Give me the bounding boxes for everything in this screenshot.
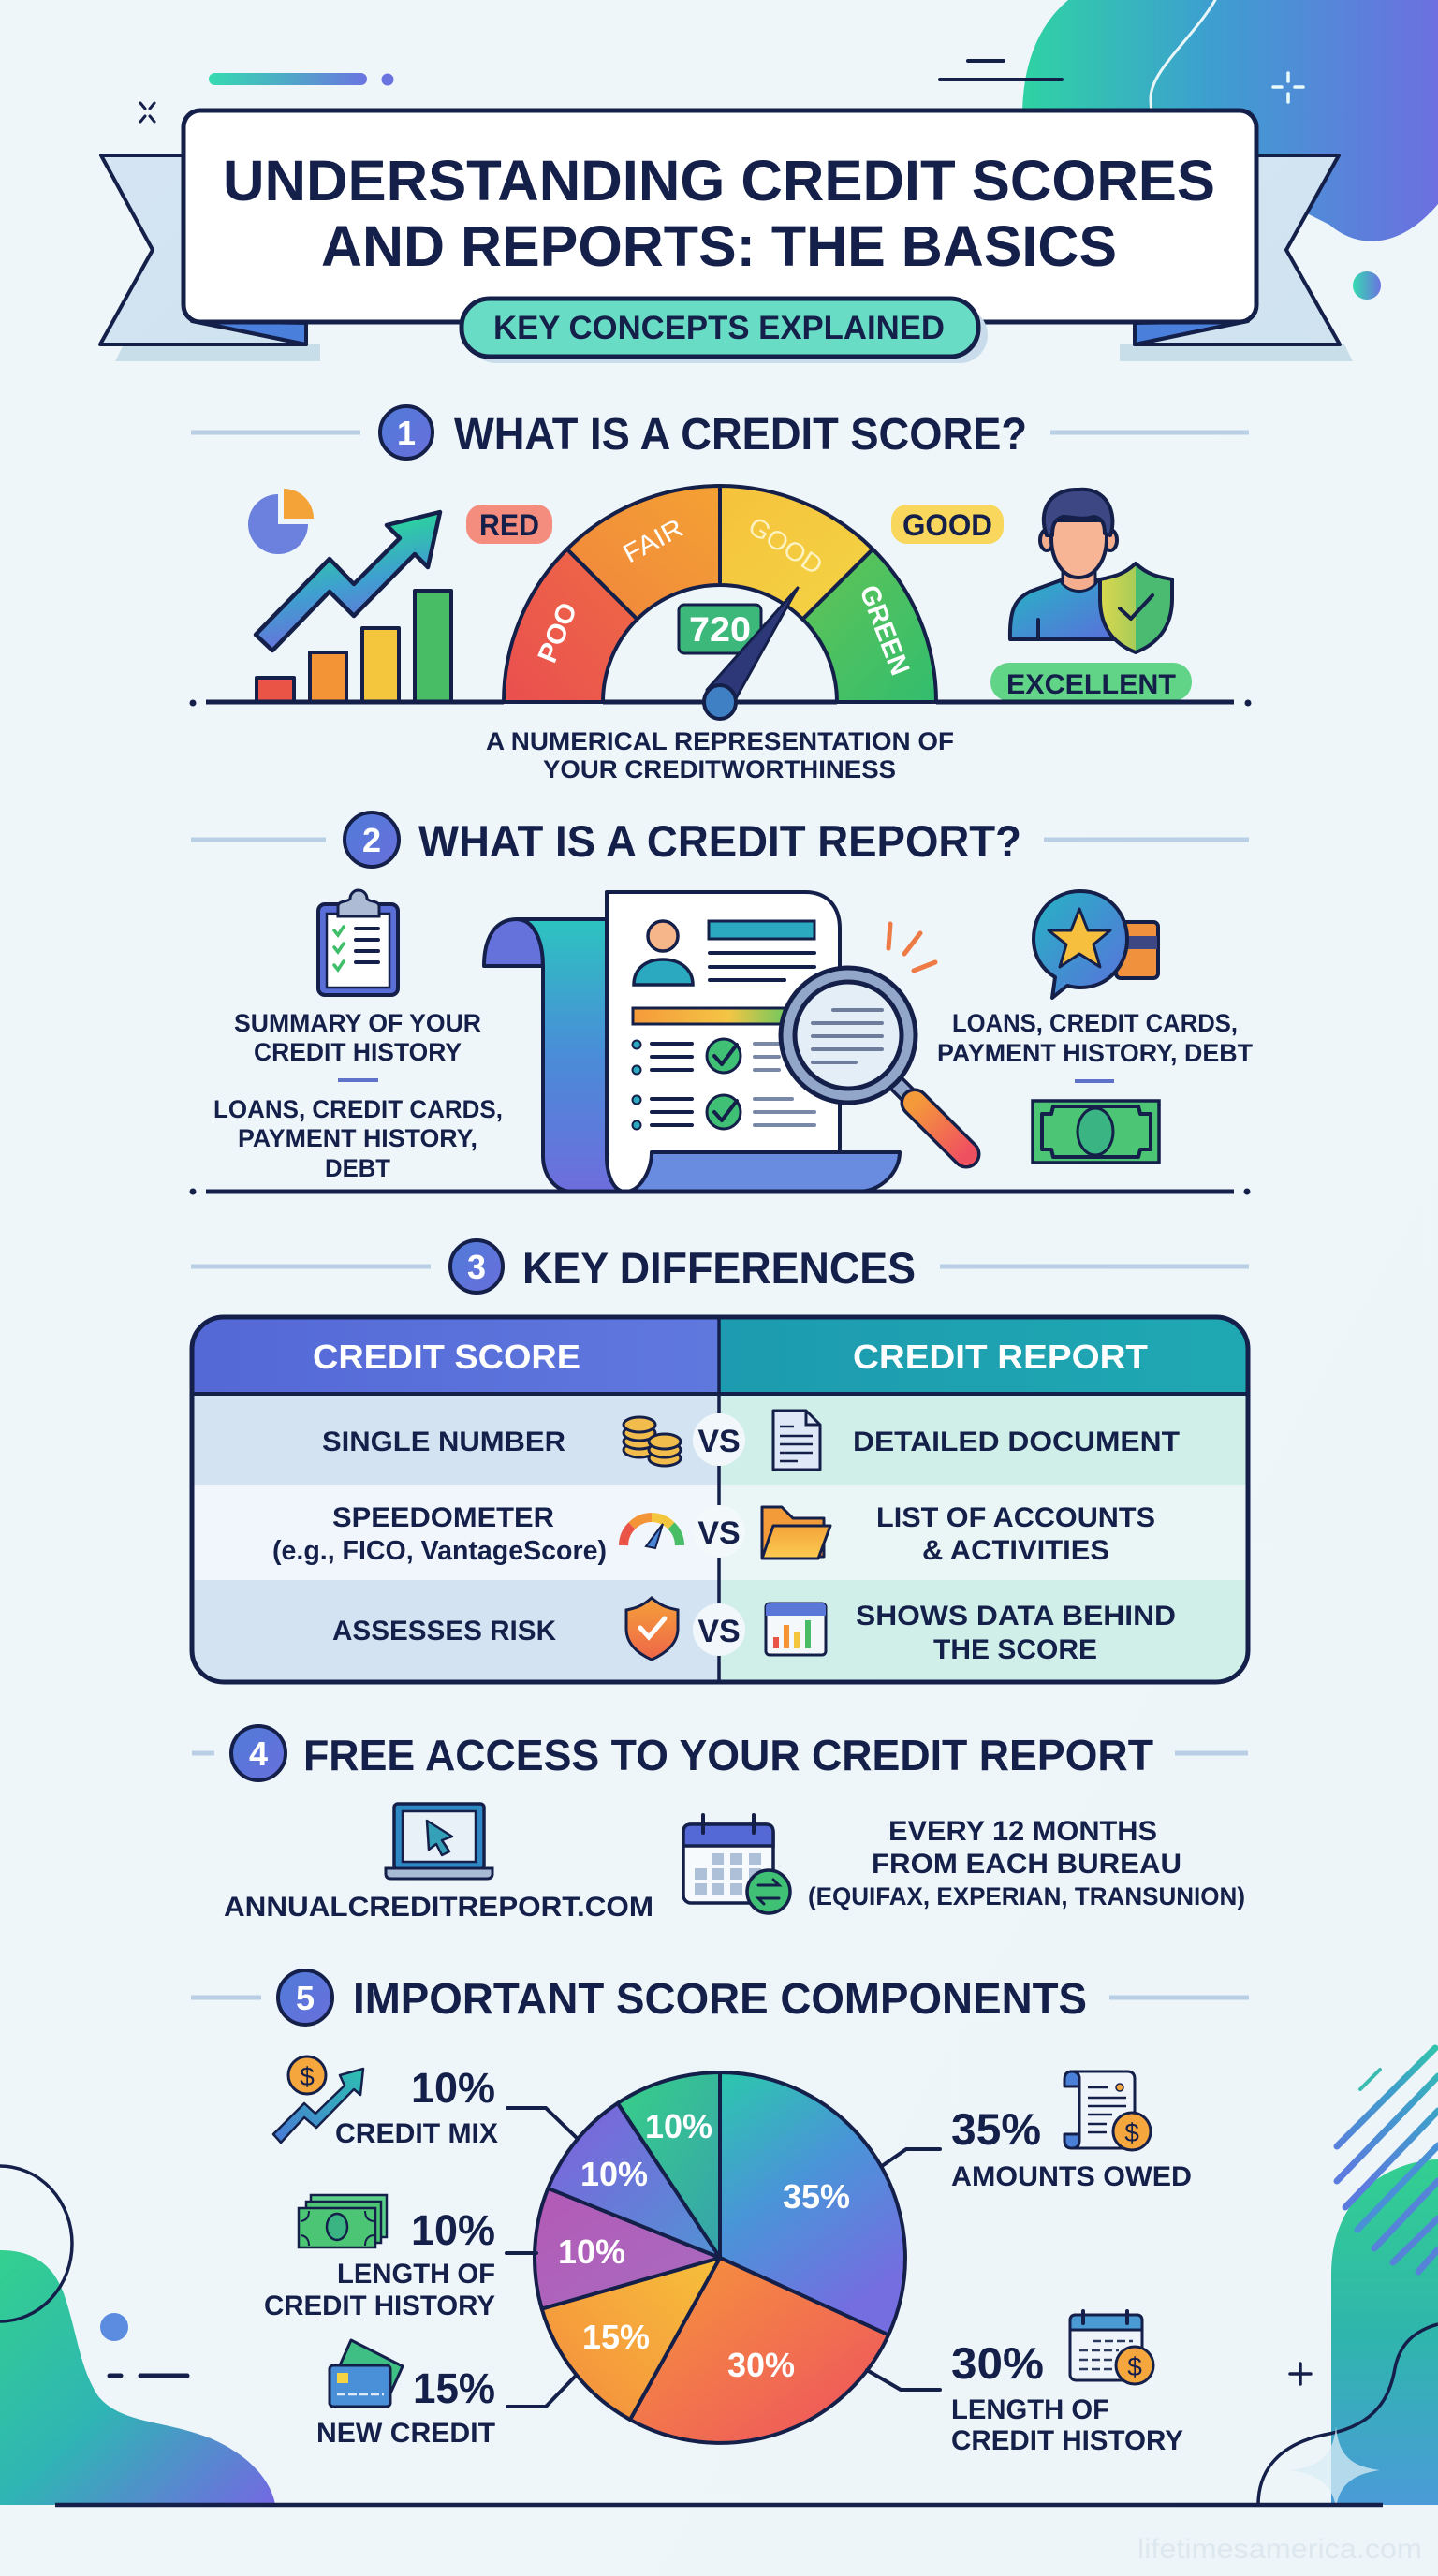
gauge: FAIR — [618, 513, 688, 568]
ribbon shadow — [115, 344, 1353, 361]
pie chart: score components: 10% — [645, 2107, 712, 2145]
caption: credit score definition: YOUR CREDITWORTHINESS — [543, 755, 896, 783]
label: new credit: NEW CREDIT — [316, 2418, 495, 2449]
label: GOOD — [891, 505, 1004, 544]
icon: folder — [762, 1507, 830, 1559]
label: amounts owed: AMOUNTS OWED — [951, 2161, 1192, 2192]
page — [607, 892, 840, 1192]
table headers: CREDIT SCORE — [313, 1338, 580, 1376]
comparison table: & ACTIVITIES — [922, 1535, 1109, 1566]
illustration: credit report scroll — [484, 892, 900, 1192]
icon: laptop — [386, 1804, 492, 1879]
title banner — [100, 110, 1353, 363]
decorative blob: bottom left — [0, 2166, 275, 2505]
label: EXCELLENT — [990, 663, 1192, 701]
section 1 heading: WHAT IS A CREDIT SCORE? — [454, 410, 1027, 460]
watermark text: lifetimesamerica.com — [1137, 2534, 1422, 2565]
pie chart: score components: 35% — [783, 2177, 850, 2216]
label: credit mix — [335, 2064, 498, 2149]
icon: money stack — [299, 2195, 387, 2247]
text: website: ANNUALCREDITREPORT.COM — [224, 1892, 653, 1923]
comparison table: THE SCORE — [933, 1634, 1097, 1665]
comparison table — [192, 1317, 1248, 1682]
text: summary of credit history — [234, 1009, 481, 1066]
row 1: SINGLE NUMBER — [322, 1427, 565, 1457]
pie chart: score components: 30% — [727, 2346, 795, 2384]
text: every 12 months: (EQUIFAX, EXPERIAN, TRANSUNION) — [808, 1882, 1245, 1910]
section 2 ground line — [189, 1189, 1251, 1194]
text: every 12 months: FROM EACH BUREAU — [872, 1849, 1181, 1880]
ribbon right — [1135, 155, 1340, 344]
decorative blob: bottom right — [1258, 2159, 1438, 2505]
needle — [707, 588, 798, 700]
title box — [183, 110, 1256, 322]
text: loans left — [213, 1095, 503, 1182]
text: loans right — [937, 1009, 1253, 1067]
label: length of credit history left — [264, 2206, 495, 2321]
caption: credit score definition: A NUMERICAL REPRESENTATION OF — [486, 727, 954, 755]
bar chart: rising bars — [257, 591, 451, 702]
icon: calendar — [683, 1815, 790, 1913]
text: every 12 months — [808, 1816, 1245, 1910]
icon: magnifying glass — [781, 968, 966, 1154]
label: length of credit history right: 30% — [951, 2338, 1044, 2388]
label: EXCELLENT: EXCELLENT — [1006, 669, 1176, 700]
icon: calendar and coin: $ — [1127, 2352, 1142, 2381]
gauge: 720 — [689, 610, 751, 649]
decorative dashes: top — [940, 61, 1062, 80]
label: new credit: 15% — [413, 2364, 495, 2412]
caption: credit score definition — [486, 727, 954, 783]
comparison table: (e.g., FICO, VantageScore) — [272, 1536, 607, 1566]
arrow: rising trend — [256, 512, 440, 651]
decorative blob: top right — [1022, 0, 1438, 242]
icon: document — [773, 1411, 820, 1470]
icon: person with shield — [1010, 490, 1172, 652]
section 4 heading: FREE ACCESS TO YOUR CREDIT REPORT — [303, 1731, 1153, 1779]
icon: coin and arrow: $ — [300, 2062, 315, 2091]
comparison table: VS — [697, 1424, 741, 1459]
title text: UNDERSTANDING CREDIT SCORES — [223, 149, 1215, 212]
progress bar — [633, 1008, 792, 1024]
vs badges — [693, 1413, 745, 1466]
icon: small pie — [248, 489, 314, 554]
decorative stripes — [1337, 2048, 1438, 2272]
decorative spark: top left — [140, 103, 154, 122]
label: new credit — [316, 2364, 495, 2449]
watermark star — [1290, 2426, 1380, 2509]
icon: mini gauge — [624, 1517, 680, 1548]
icon: star bubble and card — [1034, 891, 1158, 998]
text: loans left: DEBT — [325, 1154, 390, 1182]
text: every 12 months: EVERY 12 MONTHS — [888, 1816, 1157, 1847]
pie chart: score components: 15% — [582, 2318, 650, 2356]
score badge — [679, 605, 761, 653]
section 3 heading: KEY DIFFERENCES — [522, 1243, 916, 1293]
comparison table: VS — [697, 1515, 741, 1551]
label: length of credit history right: CREDIT HISTORY — [951, 2425, 1183, 2456]
decorative plus — [1290, 2364, 1311, 2384]
decorative dot: top right — [1353, 271, 1381, 300]
text: loans left: LOANS, CREDIT CARDS, — [213, 1095, 503, 1123]
row 3: ASSESSES RISK — [332, 1616, 556, 1647]
gauge: GREEN — [853, 581, 915, 680]
icon: chart window — [766, 1603, 826, 1655]
text: loans right: LOANS, CREDIT CARDS, — [952, 1009, 1238, 1037]
icon: calendar and coin — [1070, 2311, 1153, 2384]
section 1 heading — [191, 406, 1249, 460]
comparison table: LIST OF ACCOUNTS — [876, 1502, 1155, 1533]
comparison table: SHOWS DATA BEHIND — [856, 1601, 1176, 1632]
pie chart: score components: 10% — [580, 2155, 648, 2193]
pie chart: score components: 10% — [558, 2232, 625, 2271]
icon: receipt and coin: $ — [1124, 2118, 1139, 2147]
section 1 ground line — [189, 700, 1251, 706]
section 1 heading: 1 — [397, 414, 416, 452]
comparison table: VS — [697, 1614, 741, 1649]
text: loans left: PAYMENT HISTORY, — [238, 1124, 477, 1152]
bottom line — [55, 2503, 1383, 2507]
tray — [599, 1152, 900, 1192]
scroll body — [517, 919, 618, 1192]
icon: coins — [624, 1417, 681, 1466]
gauge — [504, 486, 936, 719]
text: summary of credit history: SUMMARY OF YOUR — [234, 1009, 481, 1037]
decorative dashes: bottom left — [110, 2374, 187, 2378]
decorative bar: top left — [209, 73, 393, 86]
row 2: SPEEDOMETER — [332, 1502, 554, 1533]
label: amounts owed: 35% — [951, 2104, 1041, 2154]
section 3 heading: 3 — [467, 1248, 486, 1286]
section 4 heading: 4 — [249, 1734, 268, 1773]
gauge: POO — [533, 598, 583, 667]
accent sparks — [888, 924, 935, 971]
section 3 heading — [191, 1240, 1249, 1293]
label: RED — [466, 505, 552, 544]
label: credit mix: CREDIT MIX — [335, 2118, 498, 2149]
subtitle pill — [468, 307, 988, 363]
section 5 heading — [191, 1970, 1249, 2025]
icon: clipboard — [318, 890, 398, 995]
checklist row 1 — [633, 1041, 640, 1048]
icon: credit cards — [330, 2340, 403, 2407]
title banner: KEY CONCEPTS EXPLAINED — [493, 310, 945, 346]
label: length of credit history right — [951, 2338, 1183, 2456]
gauge: GOOD — [743, 511, 828, 580]
section 5 heading: 5 — [296, 1979, 315, 2017]
text: summary of credit history: CREDIT HISTORY — [254, 1038, 462, 1066]
label: length of credit history left: CREDIT HISTORY — [264, 2291, 495, 2321]
section 2 heading: 2 — [362, 821, 381, 859]
label: RED: RED — [479, 508, 539, 542]
text: loans right: PAYMENT HISTORY, DEBT — [937, 1039, 1253, 1067]
pie chart: score components — [535, 2072, 905, 2443]
section 2 heading: WHAT IS A CREDIT REPORT? — [418, 816, 1021, 866]
decorative dot: bottom left — [100, 2313, 128, 2341]
label: amounts owed — [951, 2104, 1192, 2192]
label: length of credit history left: 10% — [411, 2206, 495, 2254]
comparison table: CREDIT REPORT — [853, 1338, 1148, 1376]
curl — [484, 919, 543, 966]
label: credit mix: 10% — [411, 2064, 495, 2112]
comparison table: DETAILED DOCUMENT — [853, 1427, 1180, 1457]
title banner: AND REPORTS: THE BASICS — [321, 214, 1117, 278]
section 2 heading — [191, 812, 1249, 867]
icon: coin and arrow — [273, 2056, 363, 2143]
label: length of credit history left: LENGTH OF — [337, 2259, 495, 2290]
profile — [648, 921, 678, 951]
divider dash left — [338, 1078, 378, 1082]
icon: banknote — [1033, 1101, 1159, 1163]
icon: shield check — [626, 1598, 678, 1660]
checklist row 2 — [633, 1095, 640, 1105]
icon: receipt and coin — [1064, 2071, 1151, 2150]
label: length of credit history right: LENGTH OF — [951, 2394, 1109, 2425]
section 5 heading: IMPORTANT SCORE COMPONENTS — [353, 1974, 1087, 2023]
leader lines — [506, 2108, 940, 2407]
ribbon left — [100, 155, 306, 344]
table cells — [192, 1317, 1248, 1682]
divider dash right — [1075, 1079, 1114, 1083]
label: GOOD: GOOD — [902, 508, 992, 542]
